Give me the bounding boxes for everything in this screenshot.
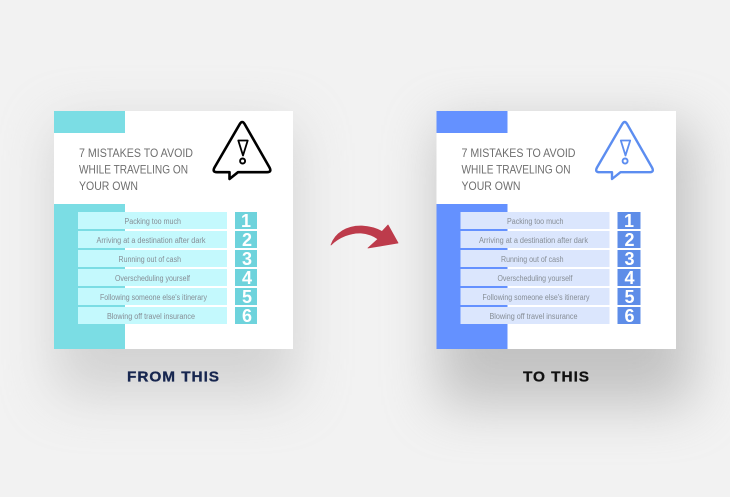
list rows: Arriving at a destination after dark [479, 236, 588, 245]
list rows [78, 212, 227, 324]
top accent band [54, 111, 125, 133]
number badges [235, 211, 257, 326]
panel: after design, blue [436, 111, 676, 349]
number badges: 5 [624, 287, 635, 307]
number badges: 4 [624, 268, 635, 288]
number badges: 1 [241, 211, 251, 231]
number badges: 3 [624, 249, 635, 269]
heading: 7 MISTAKES TO AVOID [79, 146, 193, 160]
number badges: 5 [242, 287, 252, 307]
list rows [460, 212, 610, 324]
number badges: 6 [624, 306, 635, 326]
list rows: Blowing off travel insurance [107, 312, 195, 321]
arrow: from before to after [331, 225, 398, 248]
heading: WHILE TRAVELING ON [79, 162, 188, 176]
label: from this: FROM THIS [127, 370, 220, 386]
number badges: 2 [624, 230, 635, 250]
icon: warning triangle [596, 122, 653, 179]
number badges: 6 [242, 306, 252, 326]
list rows: Running out of cash [501, 255, 564, 264]
number badges: 3 [242, 249, 252, 269]
heading: 7 MISTAKES TO AVOID [462, 146, 576, 160]
icon: warning triangle [214, 122, 270, 179]
heading: WHILE TRAVELING ON [462, 162, 570, 176]
list rows: Overscheduling yourself [115, 274, 191, 283]
list rows: Arriving at a destination after dark [96, 236, 206, 245]
list rows: Packing too much [507, 217, 564, 226]
number badges [618, 211, 640, 326]
heading: YOUR OWN [462, 179, 520, 193]
heading: YOUR OWN [79, 179, 138, 193]
side accent band [436, 204, 508, 349]
number badges: 4 [242, 268, 252, 288]
list rows: Following someone else's itinerary [482, 293, 590, 302]
panel: before design, teal [54, 111, 293, 349]
list rows: Overscheduling yourself [498, 274, 573, 283]
number badges: 1 [624, 211, 634, 231]
list rows: Blowing off travel insurance [490, 312, 578, 321]
top accent band [436, 111, 508, 133]
list rows: Running out of cash [118, 255, 181, 264]
label: to this: TO THIS [523, 370, 590, 386]
number badges: 2 [242, 230, 252, 250]
list rows: Packing too much [124, 217, 181, 226]
side accent band [54, 204, 125, 349]
list rows: Following someone else's itinerary [100, 293, 207, 302]
